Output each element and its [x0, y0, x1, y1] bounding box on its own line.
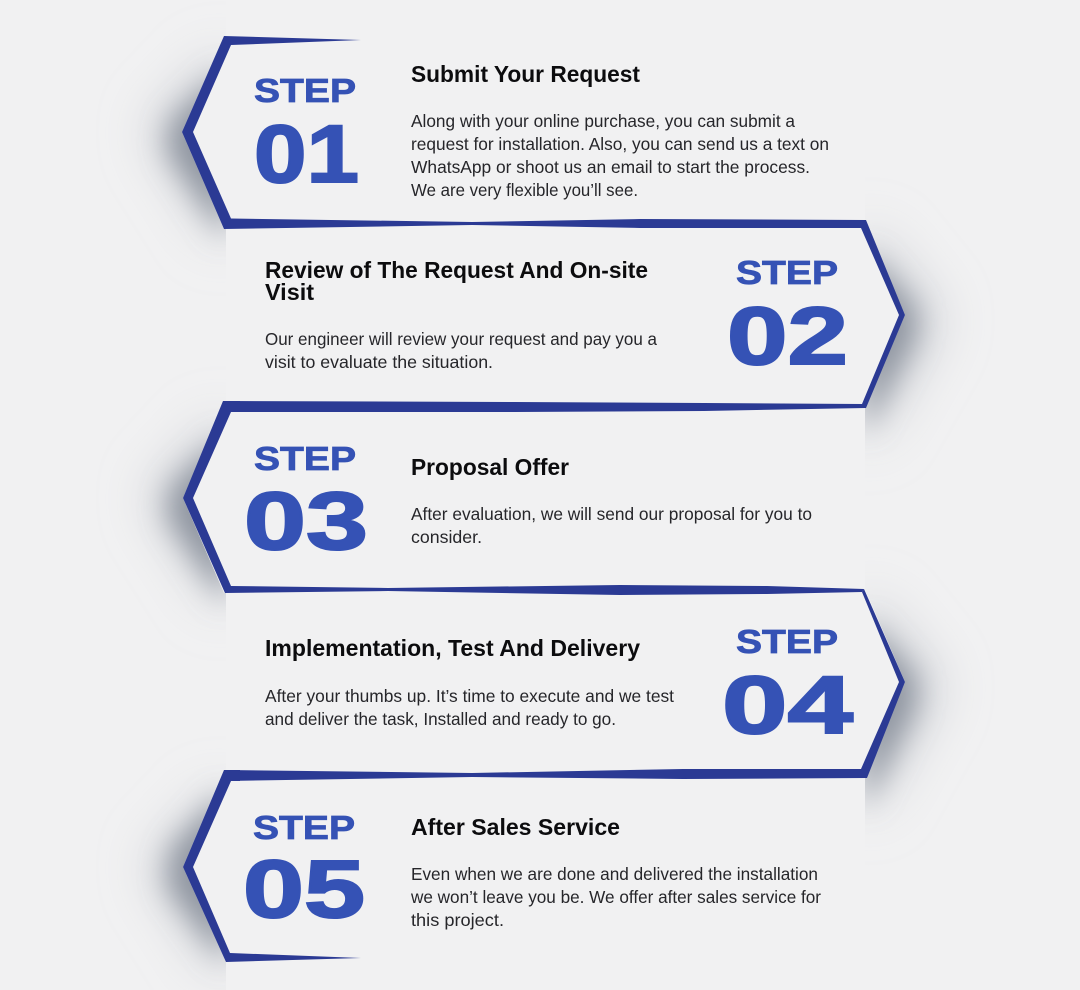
- step 4 heading: Implementation, Test And Delivery: [265, 635, 640, 661]
- step 5 badge: [243, 809, 365, 935]
- step 3 description: [411, 504, 812, 547]
- panel: step 3: [183, 401, 864, 595]
- step 3 badge: STEP: [254, 440, 356, 477]
- step 5 description: this project.: [411, 910, 504, 930]
- step 3 description: After evaluation, we will send our proposal for you to: [411, 504, 812, 524]
- panel: step 1: [182, 36, 829, 229]
- step 3 badge: 03: [244, 476, 368, 567]
- step 3 heading: Proposal Offer: [411, 454, 569, 480]
- step 2 heading: [265, 257, 648, 305]
- step 5 description: Even when we are done and delivered the installation: [411, 864, 818, 884]
- step 2 badge: 02: [727, 291, 848, 382]
- step 1 heading: Submit Your Request: [411, 61, 640, 87]
- step 1 description: WhatsApp or shoot us an email to start the process.: [411, 157, 810, 177]
- step 2 heading: Visit: [265, 279, 314, 305]
- step 1 badge: STEP: [254, 72, 356, 109]
- panel 3 frame: [183, 401, 864, 595]
- step 4 badge: 04: [722, 660, 854, 751]
- step 4 badge: [722, 623, 854, 751]
- step 1 description: We are very flexible you’ll see.: [411, 180, 638, 200]
- panel 4 frame: [226, 589, 905, 781]
- step 2 description: Our engineer will review your request and pay you a: [265, 329, 657, 349]
- step 1 description: request for installation. Also, you can send us a text on: [411, 134, 829, 154]
- step 5 description: we won’t leave you be. We offer after sales service for: [410, 887, 821, 907]
- step 4 description: [265, 686, 674, 729]
- panel: step 5: [183, 770, 821, 962]
- step 2 heading: Review of The Request And On-site: [265, 257, 648, 283]
- step 5 badge: 05: [243, 844, 365, 935]
- step 5 description: [410, 864, 821, 930]
- step 4 description: After your thumbs up. It’s time to execute and we test: [265, 686, 674, 706]
- step 3 description: consider.: [411, 527, 482, 547]
- step 1 description: [411, 111, 829, 200]
- panel 5 frame: [183, 770, 361, 962]
- step 3 badge: [244, 440, 368, 567]
- step 1 badge: [254, 72, 359, 200]
- step 2 badge: [727, 254, 848, 382]
- panel: step 4: [226, 589, 905, 781]
- step 4 description: and deliver the task, Installed and ready to go.: [265, 709, 616, 729]
- step 5 heading: After Sales Service: [411, 814, 620, 840]
- step 2 description: [265, 329, 657, 372]
- step 2 badge: STEP: [736, 254, 838, 291]
- panel 2 frame: [226, 219, 905, 412]
- step 2 description: visit to evaluate the situation.: [265, 352, 493, 372]
- step 1 description: Along with your online purchase, you can submit a: [411, 111, 795, 131]
- step 5 badge: STEP: [253, 809, 355, 846]
- panel 1 frame: [182, 36, 640, 229]
- step 1 badge: 01: [254, 109, 359, 200]
- step 4 badge: STEP: [736, 623, 838, 660]
- panel: step 2: [226, 219, 905, 412]
